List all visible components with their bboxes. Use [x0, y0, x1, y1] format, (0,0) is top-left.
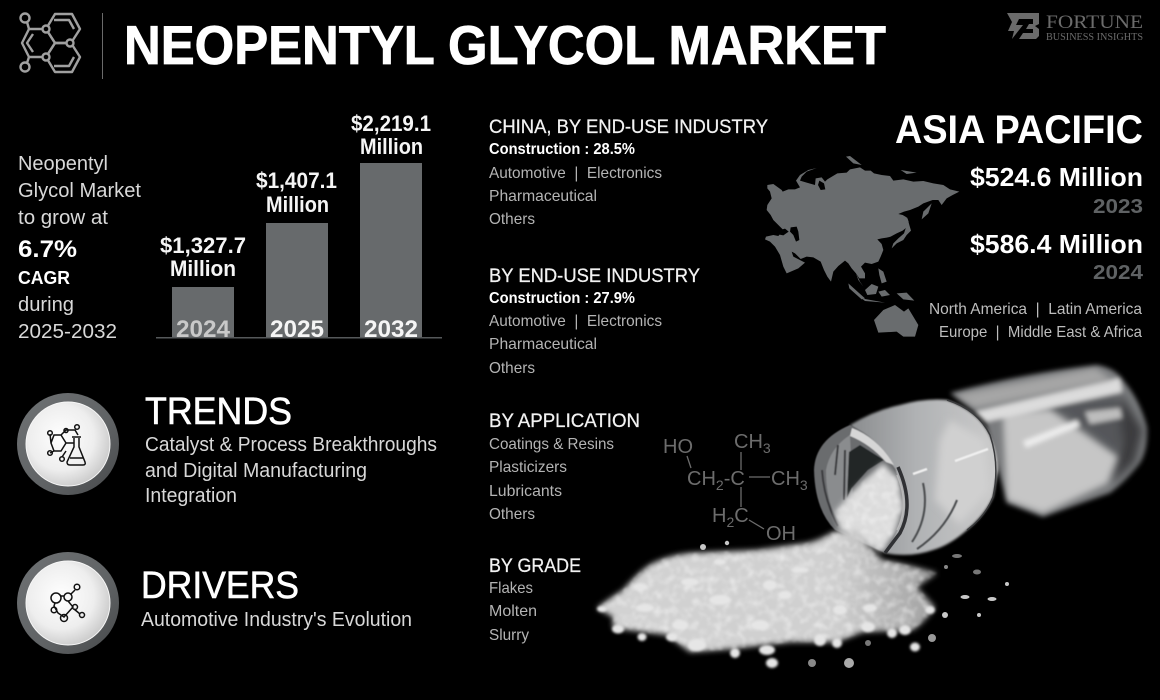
chemical formula: 2	[716, 477, 724, 493]
region stats: 2023	[1093, 196, 1143, 218]
segment: by end-use industry: Pharmaceutical	[489, 336, 597, 353]
chemical formula: 2	[726, 514, 734, 530]
segment: by end-use industry: Automotive | Electronics	[489, 313, 662, 330]
heading and text: drivers: DRIVERS	[141, 565, 299, 607]
region stats: $524.6 Million	[970, 162, 1143, 192]
region stats: 2024	[1093, 262, 1144, 284]
map: Asia Pacific	[765, 156, 959, 337]
region stats: North America | Latin America	[929, 301, 1142, 318]
CAGR text block: Neopentyl	[18, 153, 108, 175]
CAGR text block: during	[18, 294, 74, 316]
salt pile	[597, 530, 937, 652]
bar chart: 2025	[270, 316, 324, 343]
bar chart: Million	[266, 192, 329, 217]
chemical formula: -C	[724, 468, 745, 490]
segment: China by end-use industry: Construction : 28.5%	[489, 141, 635, 158]
segment: by grade: Slurry	[489, 627, 529, 644]
region stats: Europe | Middle East & Africa	[939, 324, 1142, 341]
segment: China by end-use industry: Automotive | Electronics	[489, 165, 662, 182]
bar chart: 2024	[176, 316, 231, 343]
heading and text: trends: and Digital Manufacturing	[145, 460, 367, 482]
bar chart: $1,327.7	[160, 233, 246, 258]
segment: by end-use industry: Construction : 27.9%	[489, 290, 635, 307]
icon: molecule logo	[20, 14, 80, 72]
segment: China by end-use industry: Pharmaceutical	[489, 188, 597, 205]
header divider	[102, 13, 103, 79]
segment: by application: Others	[489, 506, 535, 523]
segment: China by end-use industry	[489, 116, 768, 228]
icon: drivers badge	[17, 552, 119, 654]
CAGR text block: 6.7%	[18, 236, 77, 263]
chemical formula: HO	[663, 436, 693, 458]
segment: by grade: BY GRADE	[489, 555, 581, 577]
chemical formula: 3	[800, 477, 808, 493]
heading and text: trends: Catalyst & Process Breakthroughs	[145, 434, 437, 456]
bottle body	[950, 365, 1147, 517]
chemical formula: 3	[763, 440, 771, 456]
heading and text: drivers	[141, 565, 412, 631]
CAGR text block: Glycol Market	[18, 180, 141, 202]
chemical formula: CH	[734, 431, 763, 453]
scattered grains	[700, 541, 1009, 668]
heading and text: trends: TRENDS	[145, 391, 292, 433]
segment: by grade: Molten	[489, 603, 537, 620]
segment: by application: Plasticizers	[489, 459, 567, 476]
bar chart: $2,219.1	[351, 111, 431, 136]
heading and text: drivers: Automotive Industry's Evolution	[141, 609, 412, 631]
segment: by end-use industry	[489, 265, 700, 377]
segment: by end-use industry: Others	[489, 360, 535, 377]
segment: by end-use industry: BY END-USE INDUSTRY	[489, 265, 700, 287]
segment: by grade: Flakes	[489, 580, 533, 597]
segment: by application: Lubricants	[489, 483, 562, 500]
chemical formula: H	[712, 505, 726, 527]
segment: China by end-use industry: CHINA, BY END-USE INDUSTRY	[489, 116, 768, 138]
bottle neck	[814, 400, 998, 555]
bar chart: $1,407.1	[256, 168, 337, 193]
chemical formula: C	[734, 505, 749, 527]
region stats	[895, 108, 1144, 341]
title: NEOPENTYL GLYCOL MARKET	[124, 14, 886, 76]
bar chart: 2032	[364, 316, 418, 343]
image: glass bottle with spilled salt	[597, 365, 1147, 668]
segment: by application: BY APPLICATION	[489, 410, 640, 432]
logo: Fortune Business Insights: BUSINESS INSIGHTS	[1046, 32, 1143, 43]
bar chart: Million	[360, 134, 423, 159]
logo: Fortune Business Insights	[1007, 12, 1143, 43]
chemical formula: CH	[687, 468, 716, 490]
heading and text: trends: Integration	[145, 485, 237, 507]
chemical formula	[663, 431, 808, 545]
heading and text: trends	[145, 391, 437, 507]
CAGR text block	[18, 153, 141, 343]
bar chart	[156, 111, 442, 343]
icon: trends badge	[17, 393, 119, 495]
logo: Fortune Business Insights: FORTUNE	[1046, 12, 1143, 33]
segment: by application	[489, 410, 640, 523]
chemical formula: OH	[766, 523, 796, 545]
bar chart: Million	[170, 256, 236, 281]
salt highlights	[597, 559, 935, 668]
segment: by application: Coatings & Resins	[489, 436, 614, 453]
region stats: ASIA PACIFIC	[895, 108, 1143, 152]
chemical formula: CH	[771, 468, 800, 490]
CAGR text block: to grow at	[18, 207, 108, 229]
region stats: $586.4 Million	[970, 229, 1143, 259]
CAGR text block: 2025-2032	[18, 321, 117, 343]
CAGR text block: CAGR	[18, 268, 70, 288]
segment: by grade	[489, 555, 581, 644]
segment: China by end-use industry: Others	[489, 211, 535, 228]
